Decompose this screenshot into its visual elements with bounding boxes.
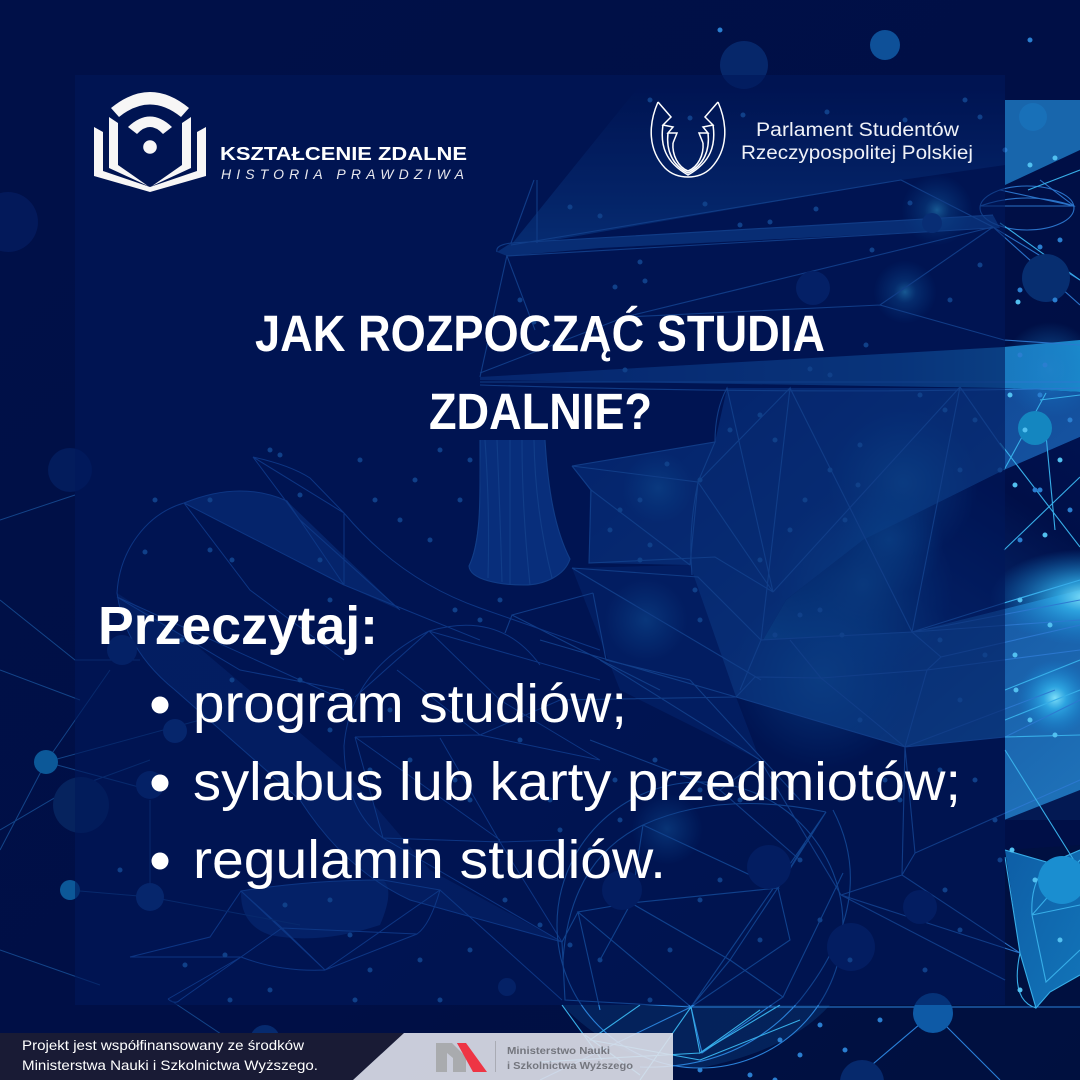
tassel: [469, 440, 570, 585]
logo name: KSZTAŁCENIE ZDALNE: [220, 144, 467, 164]
title: ZDALNIE?: [429, 383, 652, 440]
dark swoosh: [763, 437, 1080, 640]
icon: tulip emblem: [651, 102, 725, 177]
faint network lines on the left: [0, 495, 300, 1060]
ministry name: Ministerstwo Nauki: [507, 1045, 610, 1057]
list heading: Przeczytaj:: [98, 596, 378, 656]
footer light panel: [353, 1033, 673, 1080]
wireframe apple lines: [117, 457, 600, 1002]
reading list: [98, 596, 961, 890]
title: [255, 305, 825, 440]
mortarboard strap: [497, 215, 1000, 256]
logo: Parlament Studentów RP: Rzeczypospolitej Polskiej: [741, 143, 973, 164]
sphere cyan underside: [562, 1005, 830, 1068]
list item 1: program studiów;: [193, 674, 627, 734]
apple leaf and swoosh fills: [184, 491, 400, 610]
lower right object fill: [1005, 850, 1080, 1008]
right strip of mortarboard: [1005, 100, 1080, 185]
organisation name: Parlament Studentów: [756, 120, 959, 141]
mesh body: [572, 388, 1080, 820]
wireframe sphere lines: [540, 782, 1080, 1080]
panel overlay: [75, 75, 1005, 1005]
wireframe cyan lines on the lower right: [540, 170, 1080, 1080]
ribbon band: [480, 340, 1080, 392]
icon: ministry logo: [436, 1043, 487, 1072]
list item 3: regulamin studiów.: [193, 830, 666, 890]
logo: Parlament Studentów RP: [651, 102, 973, 177]
title: JAK ROZPOCZĄĆ STUDIA: [255, 305, 825, 362]
ministry divider: [495, 1041, 496, 1072]
logo: Kształcenie Zdalne: [94, 92, 468, 192]
list item 2: sylabus lub karty przedmiotów;: [193, 752, 961, 812]
footer funding note: Projekt jest współfinansowany ze środków: [22, 1037, 305, 1053]
footer: i Szkolnictwa Wyższego: [507, 1060, 633, 1072]
footer: [0, 1033, 673, 1080]
glows: [604, 174, 1080, 865]
lower mesh shade: [572, 565, 760, 760]
footer dark bar: [0, 1033, 404, 1080]
mortarboard wedge: [511, 85, 1005, 245]
logo tagline: HISTORIA PRAWDZIWA: [221, 166, 468, 182]
icon: open book with wifi signal: [94, 92, 206, 192]
wireframe lines mid blue: [469, 180, 1080, 980]
footer: Ministerstwa Nauki i Szkolnictwa Wyższego.: [22, 1057, 318, 1073]
